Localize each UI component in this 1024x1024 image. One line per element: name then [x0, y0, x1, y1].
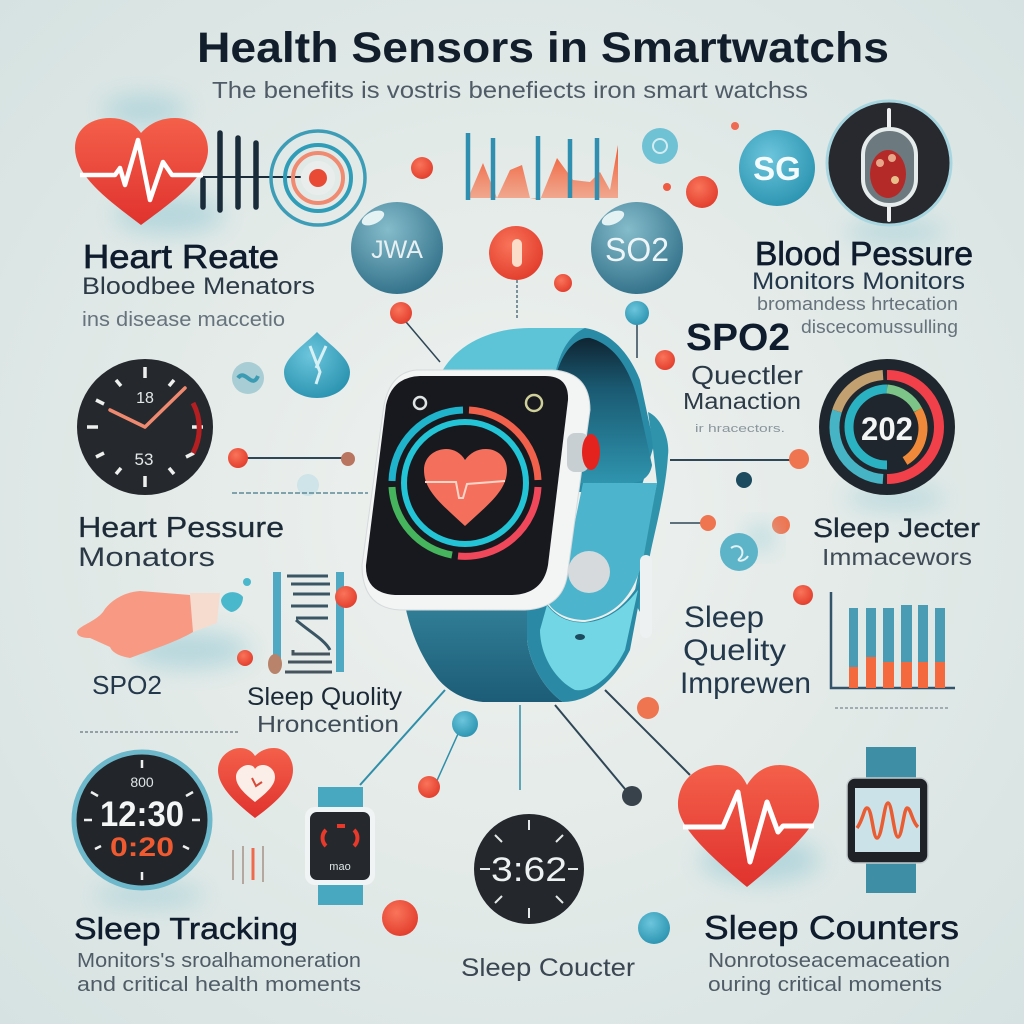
icon: big heart [678, 765, 819, 887]
text: small note: ir hracectors. [695, 423, 785, 435]
heading: sleep counters: Sleep Counters [704, 909, 959, 946]
icon: pale drop and dashed line [232, 474, 368, 496]
heading: heart rate: Heart Reate [83, 238, 279, 275]
text: disease note: ins disease maccetio [82, 309, 285, 331]
crown [567, 433, 589, 472]
icon: hand pointer [77, 578, 251, 658]
icon: center clock [474, 814, 584, 924]
icon: 202 gauge: 202 [861, 411, 913, 447]
heading: sleep quality improvement: Sleep [684, 601, 764, 634]
heading: SPO2: SPO2 [686, 317, 790, 359]
icon: small watch: mao [329, 861, 351, 873]
ring arcs [392, 410, 538, 556]
chart: top center spikes [468, 133, 618, 200]
decorative note line [80, 731, 240, 733]
icon: sound wave bars [203, 133, 300, 210]
icon: watch with chart [847, 747, 928, 893]
strap top band [440, 328, 585, 375]
text: sleep tracking note: and critical health moments [77, 974, 361, 996]
icon: analog clock [77, 359, 213, 495]
screen heart [424, 449, 507, 526]
strap back inner [557, 338, 652, 483]
watch buckle [568, 551, 610, 593]
watch [362, 328, 668, 702]
bar chart: sleep [831, 592, 955, 688]
strap tail light [540, 590, 638, 690]
text: sleep counters note [708, 950, 950, 996]
strap hole [575, 634, 585, 640]
screen small icons [414, 395, 542, 411]
strap right loop [633, 412, 668, 612]
icon: digital clock: 0:20 [110, 832, 174, 862]
icon: target rings [271, 131, 365, 225]
icon: small heart [218, 748, 293, 818]
icon: faint sketch [233, 846, 263, 884]
heading: sleep tracking: Sleep Tracking [74, 911, 298, 946]
icon: water drop [284, 332, 350, 398]
strap lower band [547, 483, 657, 620]
dots: top decorative [411, 122, 739, 208]
text: blood monitors: Bloodbee Menators [82, 273, 315, 300]
badge: SO2 sphere: SO2 [605, 231, 669, 268]
icon: digital clock [74, 752, 210, 888]
badge: DNA sphere: JWA [371, 236, 423, 264]
text: manaction: Manaction [683, 388, 801, 414]
icon: analog clock: 53 [135, 450, 153, 469]
icon: heart rate heart with pulse [75, 118, 208, 225]
side clip [640, 555, 652, 638]
connectors and small dots [228, 274, 813, 944]
icon: digital clock: 12:30 [100, 795, 184, 834]
strap bottom dark [405, 605, 563, 702]
text: monitors: Monitors Monitors [752, 268, 965, 295]
text: inmacewors: Immacewors [822, 544, 972, 570]
icon: digital clock: 800 [130, 774, 154, 790]
icon: 202 gauge [819, 359, 955, 495]
text: sleep tracking note [77, 950, 361, 996]
heading: sleep quality improvement: Quelity [683, 634, 786, 667]
heading: sleep quality improvement [680, 601, 811, 700]
crown red [582, 434, 600, 470]
icon: blood pressure dark dial [827, 101, 951, 225]
text: sleep counters note: ouring critical moments [708, 974, 942, 996]
text: quectier: Quectler [691, 360, 803, 390]
badge: SO2 sphere [591, 202, 683, 294]
strap back rim [555, 328, 654, 492]
text: sleep counters note: Nonrotoseacemaceation [708, 950, 950, 972]
label: hroncention: Hroncention [257, 711, 399, 737]
strap lower tail [527, 575, 644, 702]
label: SPO2 left: SPO2 [92, 670, 162, 700]
badge: SG [739, 130, 815, 206]
watch case [362, 370, 590, 610]
soft shadows [95, 96, 945, 905]
text: blood pressure notes: bromandess hrtecation [757, 294, 958, 314]
badge: red sphere [489, 226, 543, 320]
decorative note line [835, 707, 950, 709]
icon: center clock: 3:62 [491, 851, 567, 889]
label: sleep quality: Sleep Quolity [247, 683, 403, 711]
screen pulse [425, 481, 505, 498]
icon: small watch [305, 787, 375, 905]
text: sleep tracking note: Monitors's sroalhamoneration [77, 950, 361, 972]
subtitle: The benefits is vostris benefiects iron smart watchss [212, 77, 808, 103]
badge: DNA sphere [351, 202, 443, 294]
text: blood pressure notes [757, 294, 958, 337]
text: blood pressure notes: discecomussulling [801, 317, 958, 337]
title: Health Sensors in Smartwatchs [197, 24, 889, 72]
icon: small swirl ball [232, 362, 264, 394]
heading: sleep jecter: Sleep Jecter [813, 513, 980, 543]
heading: heart pressure: Heart Pessure [78, 512, 284, 544]
label: sleep coucter: Sleep Coucter [461, 954, 635, 982]
heading: blood pressure: Blood Pessure [755, 235, 973, 272]
badge: SG: SG [753, 150, 801, 187]
watch screen [366, 376, 568, 595]
icon: analog clock: 18 [136, 390, 154, 407]
text: monators: Monators [78, 542, 215, 572]
heading: sleep quality improvement: Imprewen [680, 667, 811, 700]
icon: DNA chart [268, 572, 357, 674]
icon: swirl ball [720, 525, 773, 571]
